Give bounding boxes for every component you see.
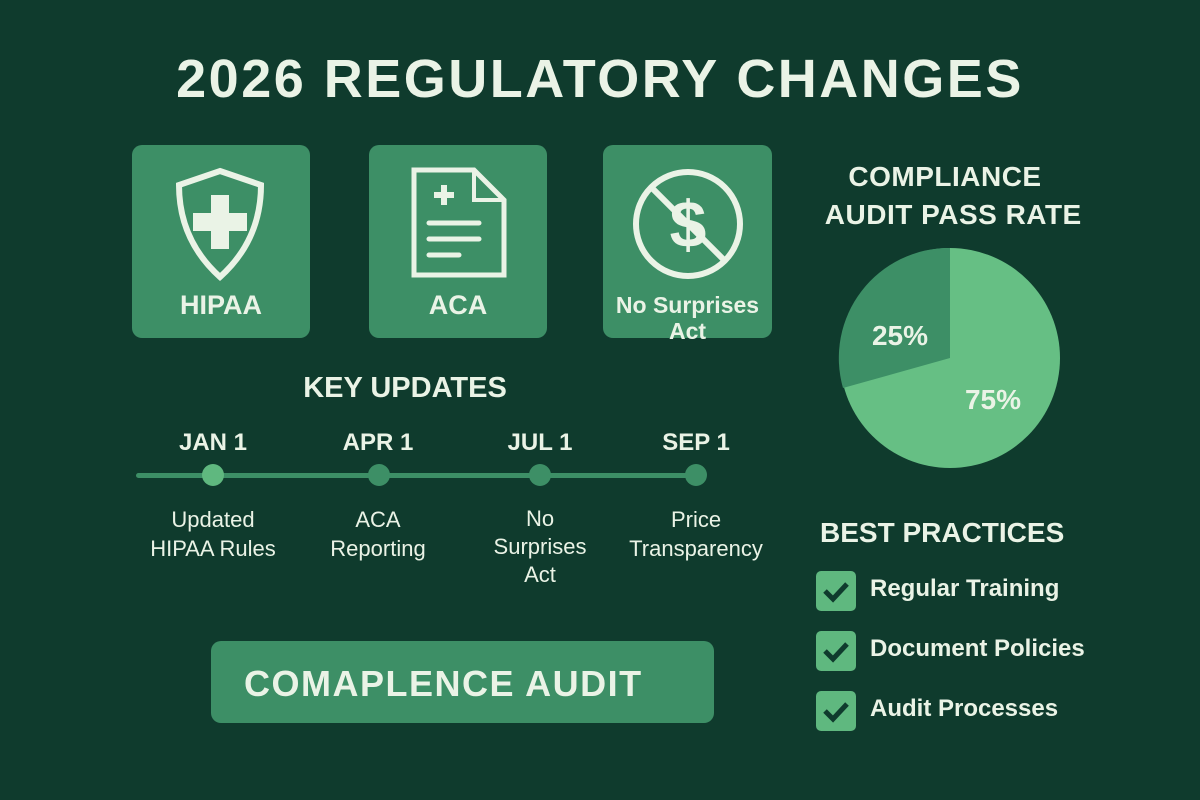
label: [616, 292, 759, 344]
item: document policies: [816, 631, 1085, 671]
milestone: Apr 1: [330, 429, 426, 561]
item: audit processes: Audit Processes: [870, 695, 1058, 722]
item: audit processes: [816, 691, 1058, 731]
milestone: Jan 1: [150, 429, 276, 561]
label: HIPAA: [180, 290, 262, 320]
milestone: Jul 1: [494, 429, 586, 587]
pie chart: 75%: [965, 384, 1021, 415]
heading: key updates: KEY UPDATES: [303, 372, 507, 404]
card: ACA: [369, 145, 547, 338]
list: best practices: [816, 571, 1085, 731]
milestone: Sep 1: Price: [671, 507, 721, 532]
item: document policies: Document Policies: [870, 635, 1085, 662]
timeline line: [136, 473, 706, 478]
timeline: [136, 429, 763, 587]
icon: shield: [176, 168, 264, 281]
heading: compliance audit pass rate: [825, 161, 1082, 230]
pie chart: 25%: [872, 320, 928, 351]
label: No Surprises: [616, 292, 759, 318]
milestone: Jan 1: HIPAA Rules: [150, 536, 276, 561]
button: compliance audit: [211, 641, 714, 723]
card: HIPAA: [132, 145, 310, 338]
icon: no dollar: [633, 169, 743, 279]
milestone: Jul 1: JUL 1: [508, 429, 572, 456]
milestone: Jan 1: Updated: [171, 507, 255, 532]
icon: no dollar: $: [670, 187, 706, 261]
milestone: Jan 1: JAN 1: [179, 429, 247, 456]
item: regular training: [816, 571, 1059, 611]
milestone: Sep 1: SEP 1: [662, 429, 730, 456]
milestone: Jul 1: Surprises: [494, 534, 586, 559]
milestone: Apr 1: ACA: [355, 507, 401, 532]
icon: document: [412, 168, 506, 278]
milestone: Jul 1: Act: [524, 562, 556, 587]
button: compliance audit: COMAPLENCE AUDIT: [244, 663, 643, 704]
label: ACA: [429, 290, 487, 320]
milestone: Apr 1: APR 1: [343, 429, 413, 456]
title: 2026 REGULATORY CHANGES: [176, 49, 1024, 109]
heading: compliance audit pass rate: COMPLIANCE: [848, 161, 1042, 192]
milestone: Sep 1: [629, 429, 763, 561]
milestone: Jul 1: No: [526, 506, 554, 531]
milestone: Sep 1: Transparency: [629, 536, 763, 561]
milestone: Apr 1: Reporting: [330, 536, 426, 561]
heading: best practices: BEST PRACTICES: [820, 517, 1064, 548]
pie chart: [838, 248, 1060, 468]
card: No Surprises Act: [603, 145, 772, 338]
heading: compliance audit pass rate: AUDIT PASS RATE: [825, 199, 1082, 230]
item: regular training: Regular Training: [870, 575, 1059, 602]
label: Act: [669, 318, 706, 344]
